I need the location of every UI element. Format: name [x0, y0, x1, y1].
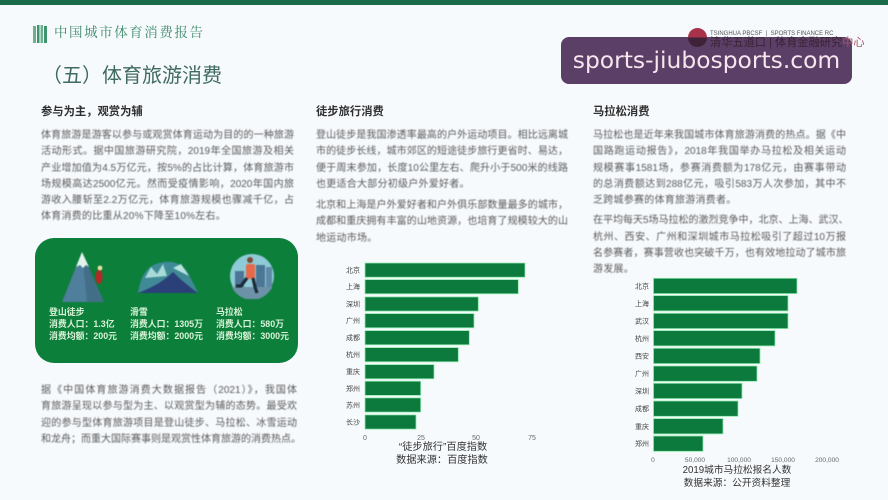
axis ticks: 50	[472, 435, 480, 442]
right column text: 游发展。	[593, 264, 634, 275]
axis ticks: 100,000	[727, 457, 751, 464]
city labels: 郑州	[635, 440, 649, 448]
right column text: 名参赛者，赛事营收也突破千万，也有效地拉动了城市旅	[593, 248, 846, 259]
middle column text: 成都和重庆拥有丰富的山地资源，也培育了规模较大的山	[316, 216, 568, 227]
text: skiing stats: 消费人口：1305万	[130, 319, 203, 329]
city labels: 重庆	[635, 422, 649, 431]
axis ticks	[651, 457, 839, 464]
left column intro text	[40, 128, 294, 222]
watermark banner	[561, 37, 852, 84]
axis ticks: 0	[651, 457, 655, 464]
text: skiing stats	[130, 307, 203, 341]
right column text: 的总消费额达到288亿元，吸引583万人次参加，其中不	[593, 179, 846, 190]
left column intro text: 活动形式。据中国旅游研究院，2019年全国旅游及相关	[41, 146, 294, 157]
left column intro text: 场规模高达2500亿元。然而受疫情影响，2020年国内旅	[41, 179, 294, 190]
axis ticks: 200,000	[815, 457, 839, 464]
chart caption: 2019城市马拉松报名人数	[683, 463, 792, 476]
left column intro text: 体育消费的比重从20%下降至10%左右。	[41, 211, 226, 222]
axis ticks: 50,000	[685, 457, 705, 464]
report title: 中国城市体育消费报告	[54, 25, 204, 40]
axis ticks: 0	[363, 435, 367, 442]
text: skiing stats: 消费均额：2000元	[130, 331, 203, 341]
text: marathon stats: 马拉松	[216, 307, 243, 317]
city labels: 深圳	[346, 300, 360, 308]
city labels: 北京	[635, 282, 649, 290]
axis ticks: 25	[417, 435, 425, 442]
chart caption	[683, 463, 792, 489]
left column closing text: 据《中国体育旅游消费大数据报告（2021）》，我国体	[41, 385, 297, 396]
middle column text: 也更适合大部分初级户外爱好者。	[316, 179, 470, 190]
axis ticks: 75	[528, 435, 536, 442]
left column heading: 参与为主，观赏为辅	[41, 106, 143, 118]
city labels: 西安	[635, 352, 649, 360]
left column closing text: 迎的参与型体育旅游项目是登山徒步、马拉松、冰雪运动	[41, 418, 297, 428]
city labels: 杭州	[346, 350, 360, 359]
middle column text: 北京和上海是户外爱好者和户外俱乐部数量最多的城市，	[316, 200, 568, 211]
city labels: 北京	[346, 266, 360, 274]
city labels	[346, 266, 360, 426]
city labels: 深圳	[635, 386, 649, 396]
city labels: 郑州	[346, 385, 360, 393]
city labels: 杭州	[635, 334, 649, 343]
panel: sports tourism categories	[35, 238, 298, 363]
chart caption: “徒步旅行”百度指数	[399, 440, 487, 453]
right column text: 马拉松也是近年来我国城市体育旅游消费的热点。据《中	[593, 130, 846, 141]
text: marathon stats: 消费均额：3000元	[216, 331, 289, 341]
icon: mountain climber	[62, 252, 104, 302]
partner logo	[688, 28, 865, 48]
city labels: 广州	[346, 316, 360, 325]
text: hiking stats: 登山徒步	[49, 307, 84, 317]
middle column text: 登山徒步是我国渗透率最高的户外运动项目。相比远离城	[316, 130, 568, 141]
middle column text: 市的徒步长线，城市郊区的短途徒步旅行更省时、易达，	[316, 146, 568, 157]
city labels: 广州	[635, 369, 649, 378]
left column intro text: 产业增加值为4.5万亿元，按5%的占比计算，体育旅游市	[41, 162, 294, 174]
text: marathon stats: 消费人口：580万	[216, 319, 284, 329]
right column text	[592, 128, 849, 275]
right column heading: 马拉松消费	[593, 106, 650, 118]
text: hiking stats: 消费人口：1.3亿	[49, 319, 115, 329]
axis ticks: 150,000	[771, 457, 795, 464]
middle column text: 地运动市场。	[316, 232, 378, 244]
text: hiking stats: 消费均额：200元	[49, 331, 117, 341]
axis ticks	[363, 435, 536, 442]
middle column heading: 徒步旅行消费	[316, 106, 384, 118]
text: hiking stats	[49, 307, 117, 341]
chart caption: 数据来源：百度指数	[396, 453, 488, 466]
right column text: 乏跨城参赛的体育旅游消费者。	[593, 195, 736, 206]
city labels: 苏州	[346, 400, 360, 410]
city labels: 上海	[346, 282, 360, 291]
left column closing text: 和龙舟；而重大国际赛事则是观赏性体育旅游的消费热点。	[41, 434, 301, 445]
chart caption	[396, 440, 488, 466]
city labels: 成都	[346, 333, 360, 342]
left column closing text	[40, 384, 301, 445]
city labels: 上海	[635, 299, 649, 308]
right column text: 杭州、西安、广州和深圳城市马拉松吸引了超过10万报	[593, 232, 846, 242]
icon: marathon runner	[229, 253, 275, 300]
text: marathon stats	[216, 306, 289, 341]
top bar	[0, 0, 888, 5]
city labels: 重庆	[346, 367, 360, 376]
bar chart: marathon registrations	[635, 278, 839, 489]
logo chinese text: 清华五道口 | 体育金融研究中心	[710, 36, 865, 48]
left column closing text: 育旅游呈现以参与型为主、以观赏型为辅的态势。最受欢	[41, 401, 297, 412]
logo emblem	[688, 28, 707, 47]
city labels: 武汉	[635, 316, 649, 326]
right column text: 规模赛事1581场，参赛消费额为178亿元，由赛事带动	[593, 162, 846, 174]
bars	[365, 263, 525, 429]
chart caption: 数据来源：公开资料整理	[684, 476, 791, 489]
right column text: 国路跑运动报告》，2018年我国举办马拉松及相关运动	[593, 146, 846, 157]
section heading: （五）体育旅游消费	[42, 65, 222, 87]
city labels: 成都	[635, 404, 649, 413]
city labels: 长沙	[346, 418, 360, 426]
bar chart: hiking Baidu index	[346, 262, 536, 466]
middle column text	[316, 128, 568, 244]
right column text: 在平均每天5场马拉松的激烈竞争中，北京、上海、武汉、	[593, 215, 849, 226]
text: skiing stats: 滑雪	[130, 307, 148, 317]
middle column text: 便于周末参加，长度10公里左右、爬升小于500米的线路	[316, 162, 568, 174]
logo english text: TSINGHUA PBCSF | SPORTS FINANCE RC	[710, 31, 833, 37]
city labels	[635, 282, 649, 448]
report logo icon	[33, 25, 47, 43]
left column intro text: 体育旅游是游客以参与或观赏体育运动为目的的一种旅游	[41, 130, 294, 141]
bars	[654, 278, 797, 451]
left column intro text: 游收入腰斩至2.2万亿元，体育旅游规模也骤减千亿，占	[41, 195, 294, 206]
icon: snowy mountain	[138, 261, 198, 294]
watermark banner: sports-jiubosports.com	[573, 46, 840, 74]
